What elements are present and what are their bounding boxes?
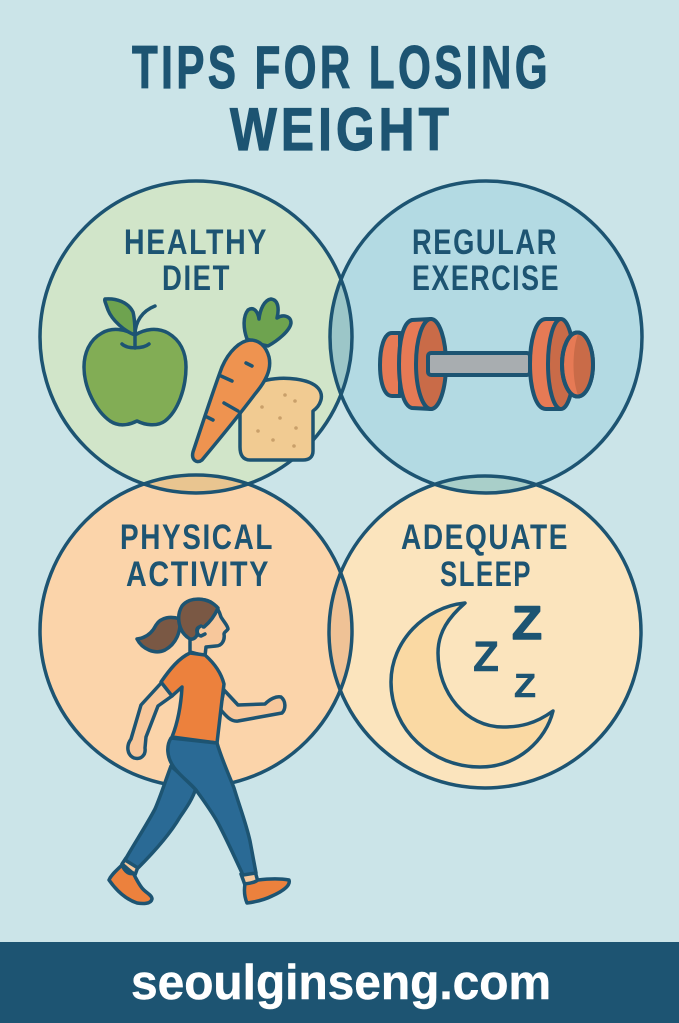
- panel: adequate sleep circle: [329, 476, 641, 788]
- icon: apple: [84, 299, 186, 425]
- heading: regular exercise: EXERCISE: [412, 259, 560, 298]
- icon: carrot: [193, 299, 291, 462]
- icon: sleeping letters: Z: [512, 596, 542, 649]
- heading: regular exercise: [412, 223, 560, 298]
- ankles: [122, 858, 139, 875]
- title: WEIGHT: [230, 96, 453, 163]
- heading: physical activity: [120, 518, 274, 594]
- front leg: [168, 738, 256, 875]
- overlap: diet and activity: [144, 475, 248, 493]
- heading: regular exercise: REGULAR: [412, 223, 558, 262]
- back arm: [128, 681, 172, 758]
- front shoe: [244, 879, 289, 903]
- shirt: [161, 653, 224, 743]
- footer bar: [0, 942, 679, 1023]
- front arm: [220, 690, 285, 721]
- heading: healthy diet: HEALTHY: [124, 223, 268, 262]
- icon: sleeping letters: [473, 596, 542, 704]
- left weights: [380, 333, 400, 396]
- ear: [197, 626, 205, 636]
- right weights: [530, 319, 560, 409]
- icon: dumbbell: [380, 319, 593, 409]
- overlap: exercise and sleep: [433, 475, 538, 494]
- overlap: diet and exercise: [330, 280, 352, 394]
- neck and face: [190, 600, 228, 656]
- bar: [428, 353, 530, 375]
- icon: bread: [240, 378, 321, 460]
- panel: regular exercise circle: [330, 181, 642, 493]
- ponytail: [137, 617, 180, 652]
- heading: healthy diet: DIET: [162, 259, 231, 298]
- panel: physical activity circle: [40, 475, 352, 787]
- heading: physical activity: PHYSICAL: [120, 518, 274, 557]
- icon: walking woman: [109, 599, 289, 904]
- heading: adequate sleep: ADEQUATE: [401, 518, 569, 557]
- title: [132, 34, 551, 163]
- heading: adequate sleep: [401, 518, 569, 594]
- back shoe: [109, 865, 152, 904]
- overlap: activity and sleep: [330, 574, 351, 689]
- heading: adequate sleep: SLEEP: [440, 555, 532, 594]
- icon: crescent moon: [391, 603, 553, 767]
- hair: [179, 599, 218, 639]
- icon: sleeping letters: Z: [473, 633, 499, 681]
- panel: healthy diet circle: [40, 181, 352, 493]
- circle outlines: [40, 181, 642, 788]
- back leg: [125, 766, 196, 868]
- icon: sleeping letters: Z: [514, 667, 536, 704]
- heading: healthy diet: [124, 223, 268, 298]
- heading: physical activity: ACTIVITY: [126, 555, 270, 594]
- footer url: seoulginseng.com: [131, 956, 551, 1010]
